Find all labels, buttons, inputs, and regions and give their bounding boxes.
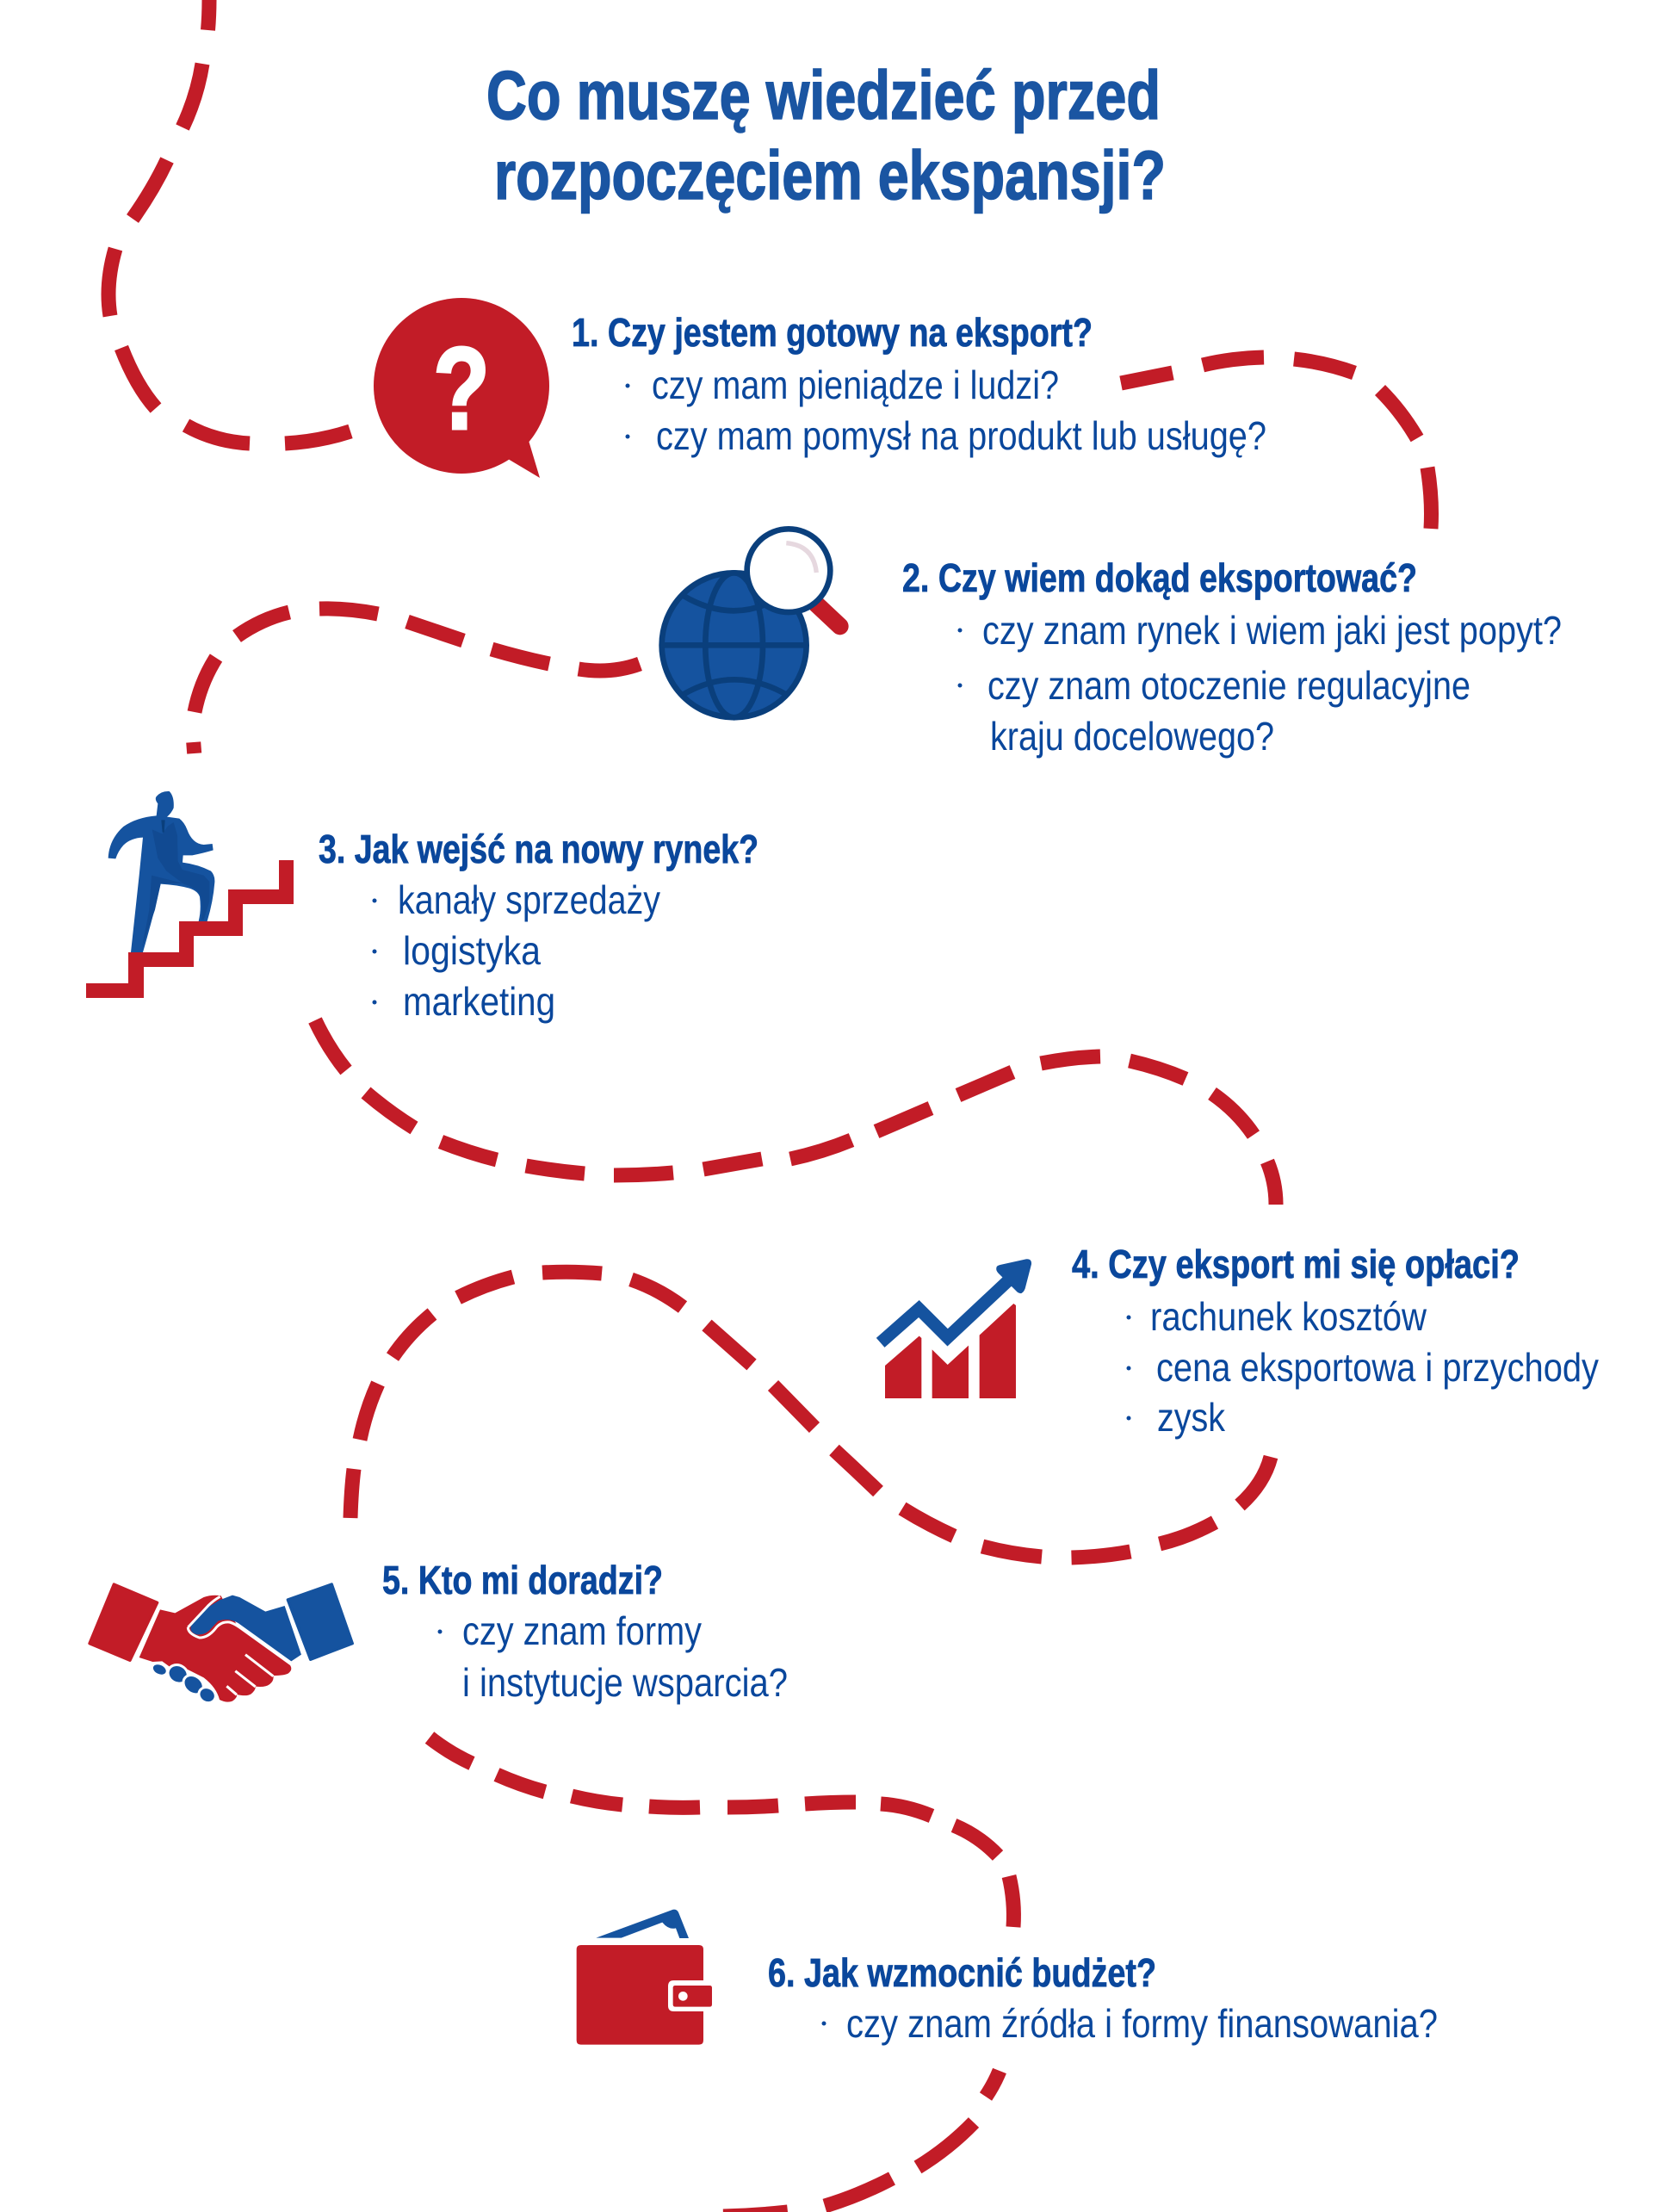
heading: step 2: 2. Czy wiem dokąd eksportować? xyxy=(902,555,1417,600)
step 2 text block: kraju docelowego? xyxy=(990,714,1274,759)
icon: businessman climbing stairs xyxy=(86,791,294,998)
step 1 text block xyxy=(572,310,1266,458)
step 4 text block: zysk xyxy=(1157,1395,1226,1440)
step 3 text block: kanały sprzedaży xyxy=(398,877,660,922)
step 3 text block: marketing xyxy=(403,979,555,1024)
step 1 text block: czy mam pomysł na produkt lub usługę? xyxy=(656,413,1266,458)
step 4 text block xyxy=(1072,1242,1599,1440)
step 3 text block xyxy=(319,827,758,1024)
step 6 text block: czy znam źródła i formy finansowania? xyxy=(846,2001,1438,2046)
icon: wallet xyxy=(577,1910,712,2045)
icon: question speech bubble xyxy=(374,298,549,478)
step 6 text block xyxy=(768,1950,1438,2046)
title: rozpoczęciem ekspansji? xyxy=(494,137,1166,214)
dashed road: handshake to wallet xyxy=(430,1738,1013,1927)
step 3 text block: logistyka xyxy=(403,928,541,973)
dashed road: chart loop to handshake xyxy=(350,1272,1271,1558)
icon: globe with magnifying glass xyxy=(662,529,840,717)
dashed road: top left to question bubble xyxy=(108,0,350,443)
heading: step 6: 6. Jak wzmocnić budżet? xyxy=(768,1950,1156,1995)
step 5 text block: czy znam formy xyxy=(462,1608,702,1653)
heading: step 1: 1. Czy jestem gotowy na eksport? xyxy=(572,310,1093,355)
step 4 text block: rachunek kosztów xyxy=(1150,1294,1427,1339)
step 2 text block xyxy=(902,555,1562,759)
title: Co muszę wiedzieć przed xyxy=(486,57,1161,133)
icon: question speech bubble: ? xyxy=(433,323,490,454)
dashed road: stairs to chart xyxy=(315,1020,1276,1205)
dashed road: wallet to bottom edge xyxy=(723,2071,1000,2212)
heading: step 4: 4. Czy eksport mi się opłaci? xyxy=(1072,1242,1520,1286)
step 4 text block: cena eksportowa i przychody xyxy=(1156,1345,1599,1390)
icon: handshake xyxy=(90,1584,352,1706)
icon: growth chart with arrow xyxy=(881,1259,1031,1398)
dashed road: step 1 to globe xyxy=(1121,357,1431,529)
heading: step 3: 3. Jak wejść na nowy rynek? xyxy=(319,827,758,871)
step 2 text block: czy znam otoczenie regulacyjne xyxy=(987,663,1470,708)
step 5 text block: i instytucje wsparcia? xyxy=(462,1660,788,1705)
dashed road: globe to stairs xyxy=(194,609,640,753)
step 2 text block: czy znam rynek i wiem jaki jest popyt? xyxy=(982,608,1562,653)
heading: step 5: 5. Kto mi doradzi? xyxy=(382,1558,663,1602)
title xyxy=(486,57,1166,214)
step 5 text block xyxy=(382,1558,788,1705)
step 1 text block: czy mam pieniądze i ludzi? xyxy=(652,362,1059,407)
